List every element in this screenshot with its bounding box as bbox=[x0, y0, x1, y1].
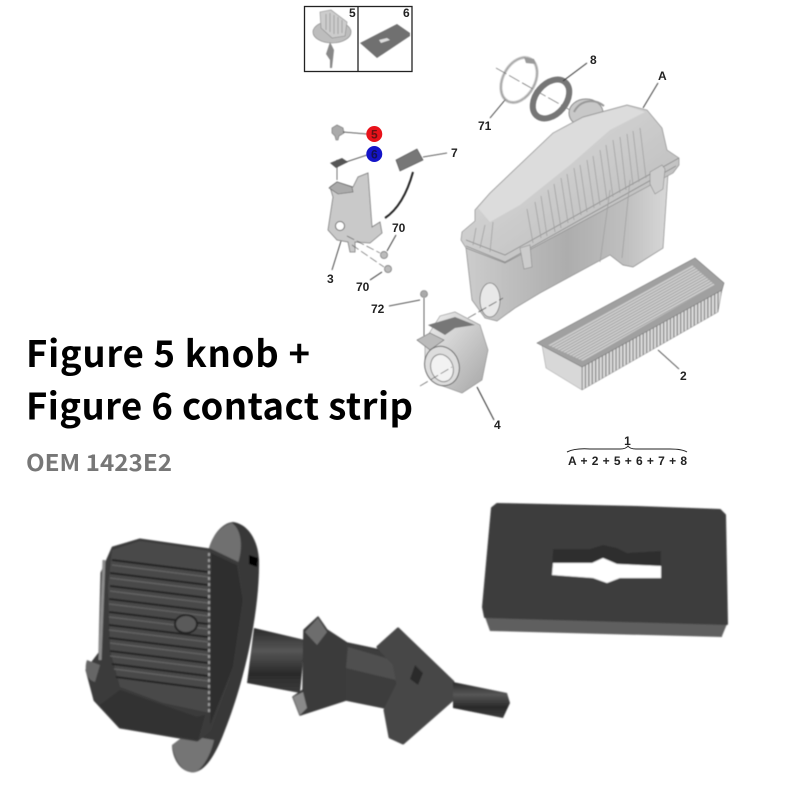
inset icon: contact strip bbox=[360, 24, 410, 58]
callout marker 6 bbox=[366, 146, 382, 162]
assembly formula: 1 bbox=[624, 434, 631, 448]
photo: knob bbox=[86, 522, 510, 772]
part 72: screw bbox=[389, 290, 428, 336]
part labels: 4 bbox=[494, 418, 501, 432]
part 3: bracket bbox=[328, 160, 382, 270]
part labels: 70 bbox=[356, 280, 370, 294]
part labels: 7 bbox=[451, 146, 458, 160]
part labels: 8 bbox=[590, 53, 597, 67]
bolts 70 bbox=[347, 235, 396, 280]
part labels bbox=[327, 53, 687, 432]
inset label 5: 5 bbox=[349, 6, 356, 20]
part labels: A bbox=[658, 69, 667, 83]
callout marker 6: 6 bbox=[371, 148, 378, 162]
title bbox=[26, 325, 413, 430]
title: Figure 6 contact strip bbox=[26, 378, 413, 430]
part labels: 70 bbox=[392, 221, 406, 235]
part 4: throttle duct bbox=[417, 298, 503, 420]
assembly formula bbox=[567, 434, 687, 468]
part 2: panel filter bbox=[537, 258, 724, 390]
callout marker 5: 5 bbox=[371, 128, 378, 142]
part labels: 3 bbox=[327, 272, 334, 286]
air filter box A bbox=[461, 83, 679, 321]
inset legend: parts 5 and 6 bbox=[304, 6, 412, 72]
callout marker 5 bbox=[366, 126, 382, 142]
inset icon: knob bbox=[313, 10, 351, 68]
part 5 small knob and part 6 small pad bbox=[330, 125, 367, 168]
OEM number: OEM 1423E2 bbox=[26, 444, 172, 478]
assembly formula: A + 2 + 5 + 6 + 7 + 8 bbox=[568, 454, 687, 468]
part labels: 2 bbox=[680, 369, 687, 383]
part 71: clamp ring bbox=[490, 51, 570, 118]
part 7: clip and hose bbox=[385, 149, 447, 218]
part labels: 71 bbox=[478, 119, 492, 133]
title: Figure 5 knob + bbox=[26, 325, 310, 378]
part labels: 72 bbox=[371, 302, 385, 316]
inset label 6: 6 bbox=[403, 6, 410, 20]
exploded diagram bbox=[327, 51, 724, 468]
photo: contact strip bbox=[483, 504, 727, 637]
part 8: sleeve bbox=[525, 63, 587, 125]
